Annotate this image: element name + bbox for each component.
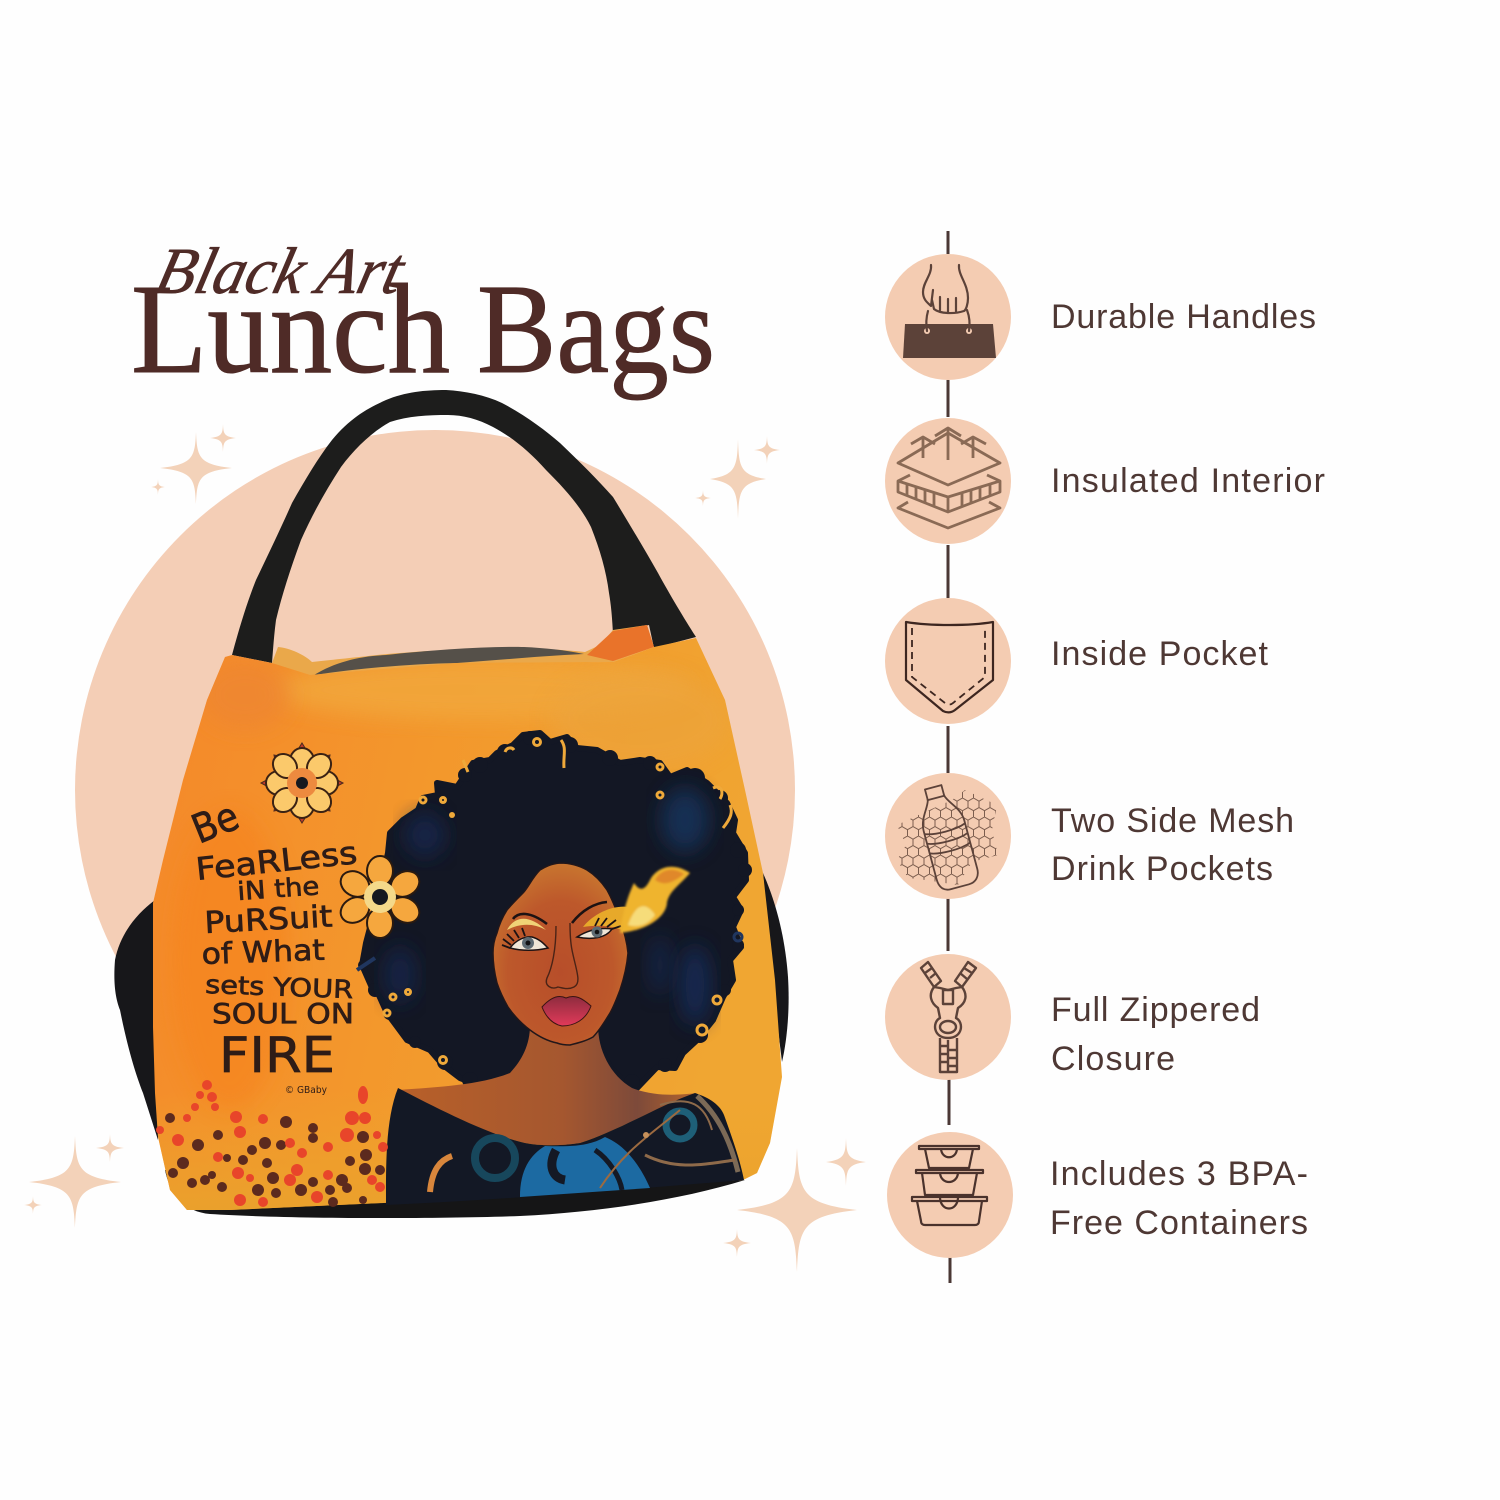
feature: mesh drink pockets [885, 773, 1304, 899]
lips [542, 996, 591, 1026]
top flower [261, 743, 343, 823]
label: Insulated Interior [1051, 462, 1325, 500]
icon: insulation layers [885, 418, 1011, 544]
title script line: Black Art: Black Art [148, 235, 413, 308]
painted quote: FeaRLess [194, 835, 359, 888]
painted quote: © GBaby [285, 1085, 327, 1096]
painted quote: FIRE [219, 1027, 335, 1084]
title main line: Lunch Bags: Lunch [131, 258, 450, 400]
bag handles [232, 390, 696, 663]
lunch bag illustration [114, 390, 790, 1218]
sparkles [24, 424, 866, 1272]
bag top opening [272, 625, 654, 678]
patterned dress [386, 1088, 744, 1205]
afro hair [357, 731, 752, 1098]
label: Two Side Mesh [1051, 802, 1294, 840]
painted quote: Be [186, 793, 245, 853]
bag bottom edge [165, 1170, 745, 1218]
side mesh pockets [114, 873, 789, 1140]
painted quote [186, 793, 359, 1096]
vertical connector line [948, 231, 950, 1283]
feature: zippered closure [885, 954, 1270, 1080]
side flower [336, 856, 424, 938]
painted quote: PuRSuit [204, 899, 334, 941]
golden hair accent [620, 867, 690, 933]
feature: BPA-free containers [887, 1132, 1319, 1258]
feature: insulated interior [885, 418, 1325, 544]
icon: pocket [885, 598, 1011, 724]
label: Closure [1051, 1040, 1175, 1078]
painted dots [156, 1080, 388, 1207]
eyes and brows [502, 902, 628, 950]
title main line: Lunch Bags: Bags [477, 258, 715, 400]
label: Durable Handles [1051, 298, 1316, 336]
painted quote: SOUL ON [212, 997, 354, 1030]
nose [546, 923, 578, 989]
peach backdrop circle [75, 430, 795, 1150]
label: Full Zippered [1051, 991, 1260, 1029]
icon: zipper [885, 954, 1011, 1080]
label: Includes 3 BPA- [1050, 1155, 1308, 1193]
painted quote: iN the [236, 871, 320, 906]
title [131, 235, 715, 400]
title main line: Lunch Bags [131, 258, 715, 400]
feature: durable handles [885, 254, 1316, 380]
painted quote: sets YOUR [205, 970, 354, 1004]
icon: hand holding bag [885, 254, 1011, 380]
painted quote: of What [201, 933, 325, 971]
icon: bottle in mesh [885, 773, 1011, 899]
face [493, 863, 628, 1045]
neck and shoulders [398, 1025, 697, 1145]
label: Inside Pocket [1051, 635, 1269, 673]
orange bag body [150, 638, 790, 1215]
icon: stacked containers [887, 1132, 1013, 1258]
label: Free Containers [1050, 1204, 1308, 1242]
label: Drink Pockets [1051, 850, 1273, 888]
feature: inside pocket [885, 598, 1269, 724]
